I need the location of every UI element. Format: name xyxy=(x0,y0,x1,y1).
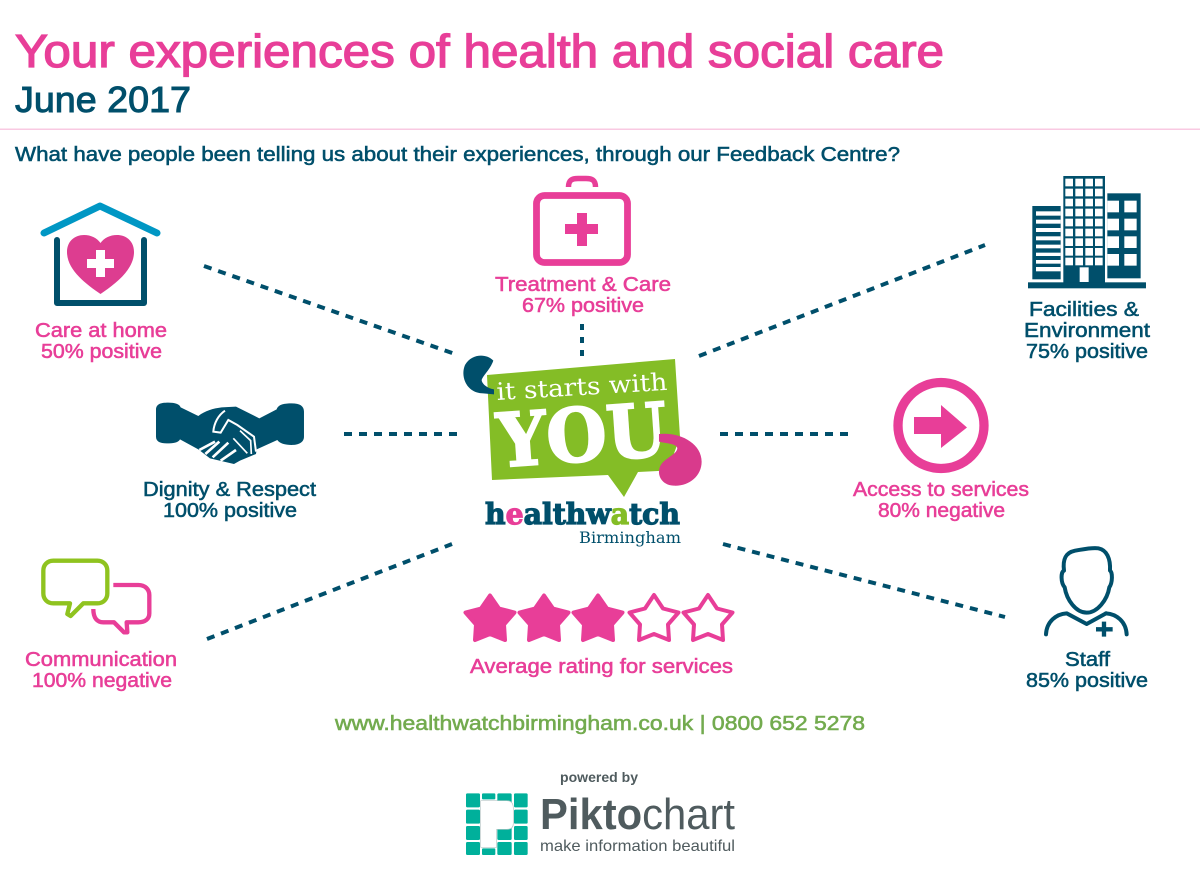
panel: facilities and environment xyxy=(1024,176,1150,363)
label: facilities and environment: Facilities & xyxy=(1029,299,1140,321)
label: facilities and environment: Environment xyxy=(1024,320,1150,342)
label: care at home: 50% positive xyxy=(41,341,162,363)
icon: medical case xyxy=(536,178,628,262)
label: communication: 100% negative xyxy=(32,670,172,692)
icon: house with heart xyxy=(44,206,157,303)
label: treatment and care xyxy=(495,274,671,317)
tagline: make information beautiful xyxy=(540,838,735,855)
label: facilities and environment: 75% positive xyxy=(1026,341,1148,363)
text: powered by: powered by xyxy=(560,769,638,785)
panel: treatment and care xyxy=(495,178,671,317)
slogan: YOU: YOU xyxy=(493,387,670,485)
label: communication xyxy=(25,649,177,692)
label: dignity and respect: Dignity & Respect xyxy=(143,479,316,501)
quote mark: pink xyxy=(659,434,702,486)
label: facilities and environment xyxy=(1024,299,1150,363)
speech bubble xyxy=(487,359,680,497)
icon: staff member xyxy=(1046,548,1127,637)
title: Your experiences of health and social care xyxy=(15,25,944,77)
label: access to services: 80% negative xyxy=(878,500,1005,522)
icon: handshake xyxy=(156,403,304,464)
logo: it starts with you, healthwatch Birmingham xyxy=(463,356,702,547)
panel: communication xyxy=(25,561,177,692)
wordmark: healthwatch: healthwatch xyxy=(485,497,680,531)
label: dignity and respect xyxy=(143,479,316,522)
date subtitle: June 2017 xyxy=(15,79,191,120)
dashed connector lines xyxy=(204,245,1005,639)
panel: average rating xyxy=(466,595,733,678)
wordmark: Birmingham: Birmingham xyxy=(579,529,681,547)
quote mark: dark xyxy=(463,356,494,394)
icon: arrow in circle xyxy=(898,382,984,468)
label: staff: Staff xyxy=(1065,649,1110,671)
label: staff: 85% positive xyxy=(1026,670,1148,692)
footer: powered by Piktochart xyxy=(466,769,735,855)
icon: speech bubbles xyxy=(43,561,149,632)
label: communication: Communication xyxy=(25,649,177,671)
panel: staff xyxy=(1026,548,1148,692)
intro question: What have people been telling us about their experiences, through our Feedback Centre? xyxy=(15,144,900,166)
contact line: www.healthwatchbirmingham.co.uk | 0800 652 5278 xyxy=(334,713,865,735)
panel: dignity and respect xyxy=(143,403,316,522)
label: care at home xyxy=(35,320,167,363)
panel: care at home xyxy=(35,206,167,363)
icon: star rating xyxy=(466,595,732,640)
icon: Piktochart logo xyxy=(466,793,528,855)
label: access to services: Access to services xyxy=(853,479,1029,501)
wordmark: Piktochart: Piktochart xyxy=(540,790,735,839)
label: access to services xyxy=(853,479,1029,522)
label: care at home: Care at home xyxy=(35,320,167,342)
label: treatment and care: Treatment & Care xyxy=(495,274,671,296)
label: treatment and care: 67% positive xyxy=(522,295,644,317)
label: average rating: Average rating for services xyxy=(470,656,733,678)
slogan: it starts with: it starts with xyxy=(496,368,668,406)
label: dignity and respect: 100% positive xyxy=(163,500,297,522)
panel: access to services xyxy=(853,382,1029,522)
icon: buildings xyxy=(1028,176,1146,288)
label: staff xyxy=(1026,649,1148,692)
